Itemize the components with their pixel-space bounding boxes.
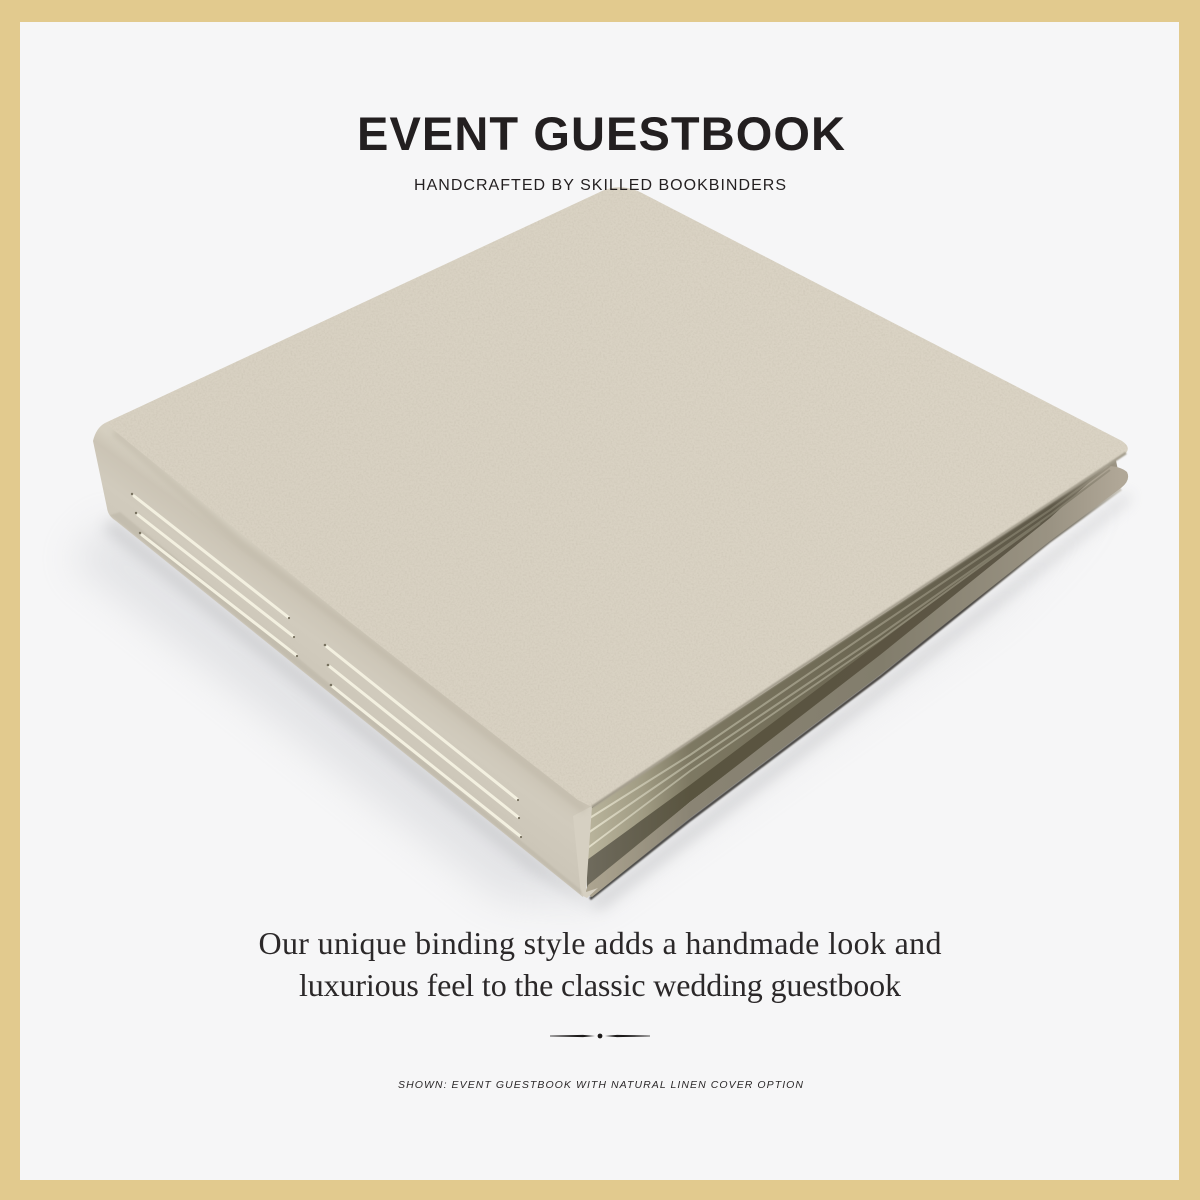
description text: luxurious feel to the classic wedding guestbook — [299, 967, 901, 1003]
stitching group: upper — [134, 496, 296, 655]
description text — [258, 925, 942, 1003]
subtitle: HANDCRAFTED BY SKILLED BOOKBINDERS — [414, 177, 786, 194]
spine lower shade — [110, 512, 583, 896]
description text: Our unique binding style adds a handmade look and — [258, 925, 942, 961]
linen texture — [105, 187, 1128, 807]
ornamental divider — [550, 1034, 650, 1038]
spine face — [93, 423, 592, 897]
spine hinge crease — [114, 432, 585, 810]
caption: SHOWN: EVENT GUESTBOOK WITH NATURAL LINEN COVER OPTION — [398, 1079, 803, 1091]
stitching group: lower — [326, 646, 520, 836]
spine end cap — [573, 806, 598, 898]
back cover lip — [585, 466, 1128, 897]
back cover edge — [590, 489, 1121, 899]
photo: linen-covered guestbook — [93, 187, 1128, 899]
title: EVENT GUESTBOOK — [357, 107, 845, 160]
page leaves — [585, 466, 1110, 850]
cover front edge shade — [592, 453, 1126, 807]
stitch holes — [131, 493, 522, 838]
cave behind pages — [585, 456, 1118, 888]
book shadow — [70, 492, 1130, 910]
front cover — [105, 187, 1128, 807]
page block — [586, 458, 1115, 860]
